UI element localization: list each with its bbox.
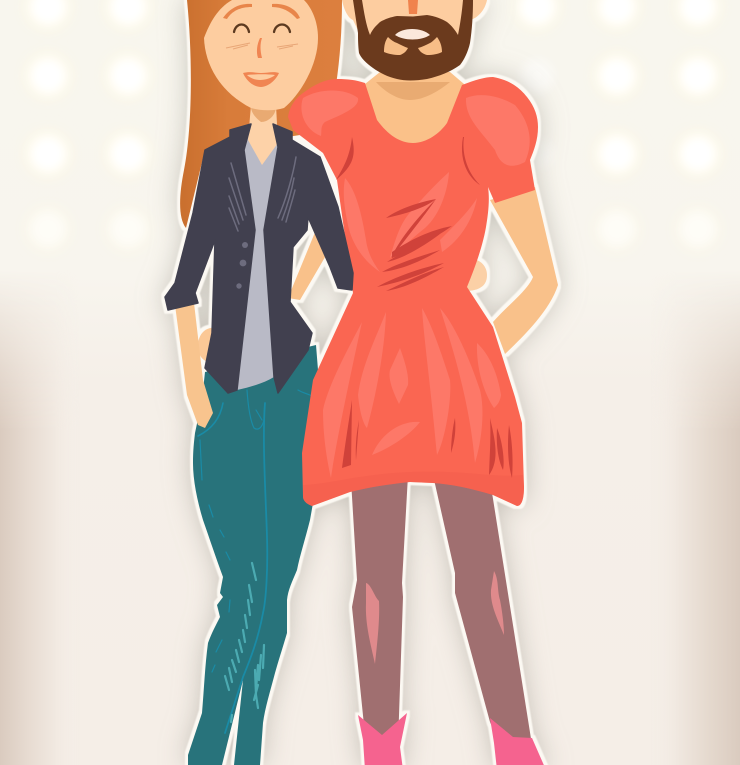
- chin patches: [384, 37, 442, 55]
- woman: jacket: [165, 124, 353, 393]
- knee highlights: [366, 583, 379, 664]
- nose: [257, 38, 262, 58]
- woman: jeans: [188, 345, 322, 765]
- man: dress: [288, 77, 538, 506]
- eyes: [234, 24, 290, 32]
- stage lights: white cores: [30, 0, 716, 247]
- jacket: fold lines: [229, 157, 296, 231]
- woman: hand on his waist: [460, 258, 487, 291]
- man: neck and chest: [365, 72, 464, 155]
- beard: [353, 0, 473, 80]
- man: arm behind woman: [288, 225, 335, 300]
- dress: light folds: [301, 90, 530, 478]
- man: right arm: [490, 187, 558, 354]
- jeans stitching: [198, 390, 312, 733]
- figures: couple with cream die-cut outline: [165, 0, 558, 765]
- man: hand at woman's waist: [198, 328, 216, 364]
- jacket: buttons: [236, 242, 248, 289]
- mouth: [243, 72, 279, 87]
- dress: hem shade: [303, 472, 524, 506]
- woman: hair: [180, 0, 342, 228]
- jeans highlights: [225, 563, 264, 722]
- woman: neck: [248, 105, 278, 165]
- stage lights: warm halos: [25, 0, 721, 252]
- mouth: [395, 29, 430, 40]
- man: legs: [351, 475, 532, 745]
- eyebrows: [223, 4, 300, 19]
- cheek lines: [226, 43, 298, 49]
- man: boots: [358, 713, 546, 765]
- woman: arm with hand in pocket: [175, 303, 213, 428]
- nose: [408, 0, 418, 14]
- woman: t-shirt: [237, 135, 280, 390]
- background: [0, 308, 740, 765]
- woman: face: [204, 0, 318, 110]
- man: head: [342, 0, 487, 80]
- dress: dark creases: [336, 137, 513, 478]
